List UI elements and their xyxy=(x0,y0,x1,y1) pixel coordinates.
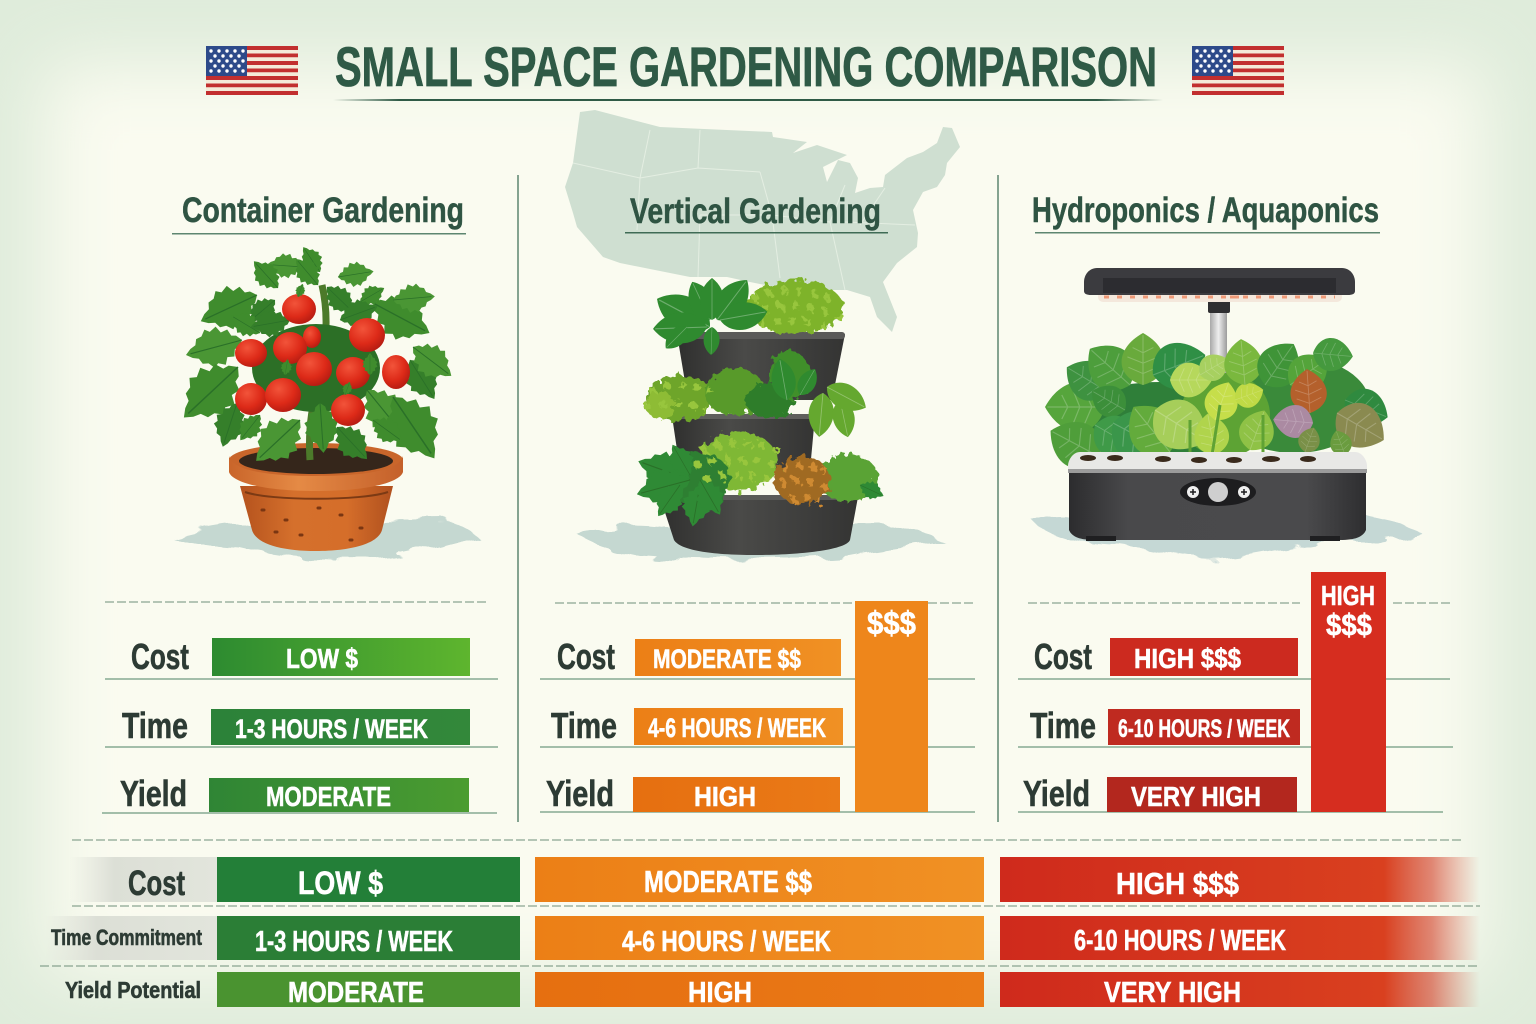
bar: vertical cost level: $$$ xyxy=(867,605,916,641)
row: container yield: MODERATE xyxy=(266,781,391,812)
panel: hydroponics / aquaponics xyxy=(1018,191,1453,814)
row: container cost xyxy=(131,636,470,677)
panel: container gardening xyxy=(102,191,498,814)
heading: container gardening: Container Gardening xyxy=(182,191,464,230)
row: container time: 1-3 HOURS / WEEK xyxy=(235,714,428,744)
row: hydroponics time: 6-10 HOURS / WEEK xyxy=(1118,715,1290,743)
divider lines: hydroponics stats xyxy=(1018,603,1453,812)
table row: cost: Cost xyxy=(128,864,185,903)
row: hydroponics yield: VERY HIGH xyxy=(1131,781,1261,812)
divider lines: vertical stats xyxy=(540,603,975,812)
table row: time commitment: Time Commitment xyxy=(51,925,203,950)
illustration: stacked planter tower xyxy=(575,271,945,560)
row: container yield xyxy=(120,773,469,814)
row: container time: Time xyxy=(122,705,188,746)
row: container cost: Cost xyxy=(131,636,189,677)
row: hydroponics time xyxy=(1030,705,1300,746)
table row: cost: HIGH $$$ xyxy=(1116,866,1239,901)
title: SMALL SPACE GARDENING COMPARISON xyxy=(335,35,1157,98)
table row: time commitment: 1-3 HOURS / WEEK xyxy=(255,926,453,958)
icon: right US flag xyxy=(1192,46,1284,95)
bar: vertical cost level xyxy=(855,601,928,812)
panel: vertical gardening xyxy=(540,192,975,814)
bar: hydroponics cost level: HIGH xyxy=(1321,580,1375,611)
table row: cost xyxy=(70,857,1480,903)
row: vertical time: 4-6 HOURS / WEEK xyxy=(648,713,826,743)
table row: cost: LOW $ xyxy=(298,865,383,901)
table row: yield potential: Yield Potential xyxy=(65,977,201,1003)
icon: US map silhouette xyxy=(565,110,960,332)
icon: left US flag xyxy=(206,46,298,95)
row: vertical cost: MODERATE $$ xyxy=(653,644,801,674)
row: hydroponics yield xyxy=(1023,773,1297,814)
heading: vertical gardening: Vertical Gardening xyxy=(630,192,881,231)
table row: time commitment: 6-10 HOURS / WEEK xyxy=(1074,925,1286,957)
table row: yield potential: MODERATE xyxy=(288,977,424,1009)
table row: yield potential: HIGH xyxy=(688,977,752,1009)
comparison table xyxy=(40,840,1480,1009)
row: hydroponics cost xyxy=(1034,636,1298,677)
table row: cost: MODERATE $$ xyxy=(644,864,812,899)
row: container cost: LOW $ xyxy=(286,643,358,674)
illustration: indoor hydroponic unit xyxy=(1032,268,1421,558)
row: hydroponics cost: HIGH $$$ xyxy=(1134,643,1241,674)
table row: time commitment xyxy=(45,916,1480,960)
illustration: tomato plant in terracotta pot xyxy=(167,241,477,559)
row: vertical yield xyxy=(546,773,840,814)
table row: yield potential: VERY HIGH xyxy=(1104,977,1241,1009)
row: vertical yield: Yield xyxy=(546,773,614,814)
row: hydroponics cost: Cost xyxy=(1034,636,1092,677)
row: vertical time xyxy=(551,705,843,746)
row: hydroponics yield: Yield xyxy=(1023,773,1090,814)
row: vertical cost: Cost xyxy=(557,636,615,677)
heading: hydroponics / aquaponics: Hydroponics / Aquaponics xyxy=(1032,191,1379,230)
bar: hydroponics cost level xyxy=(1311,572,1386,812)
table row: yield potential xyxy=(65,972,1480,1009)
row: vertical yield: HIGH xyxy=(694,781,756,812)
divider lines: container stats xyxy=(102,602,498,813)
row: vertical time: Time xyxy=(551,705,617,746)
row: container yield: Yield xyxy=(120,773,187,814)
table row: time commitment: 4-6 HOURS / WEEK xyxy=(622,926,831,958)
row: hydroponics time: Time xyxy=(1030,705,1096,746)
row: vertical cost xyxy=(557,636,841,677)
row: container time xyxy=(122,705,470,746)
bar: hydroponics cost level: $$$ xyxy=(1326,607,1372,642)
